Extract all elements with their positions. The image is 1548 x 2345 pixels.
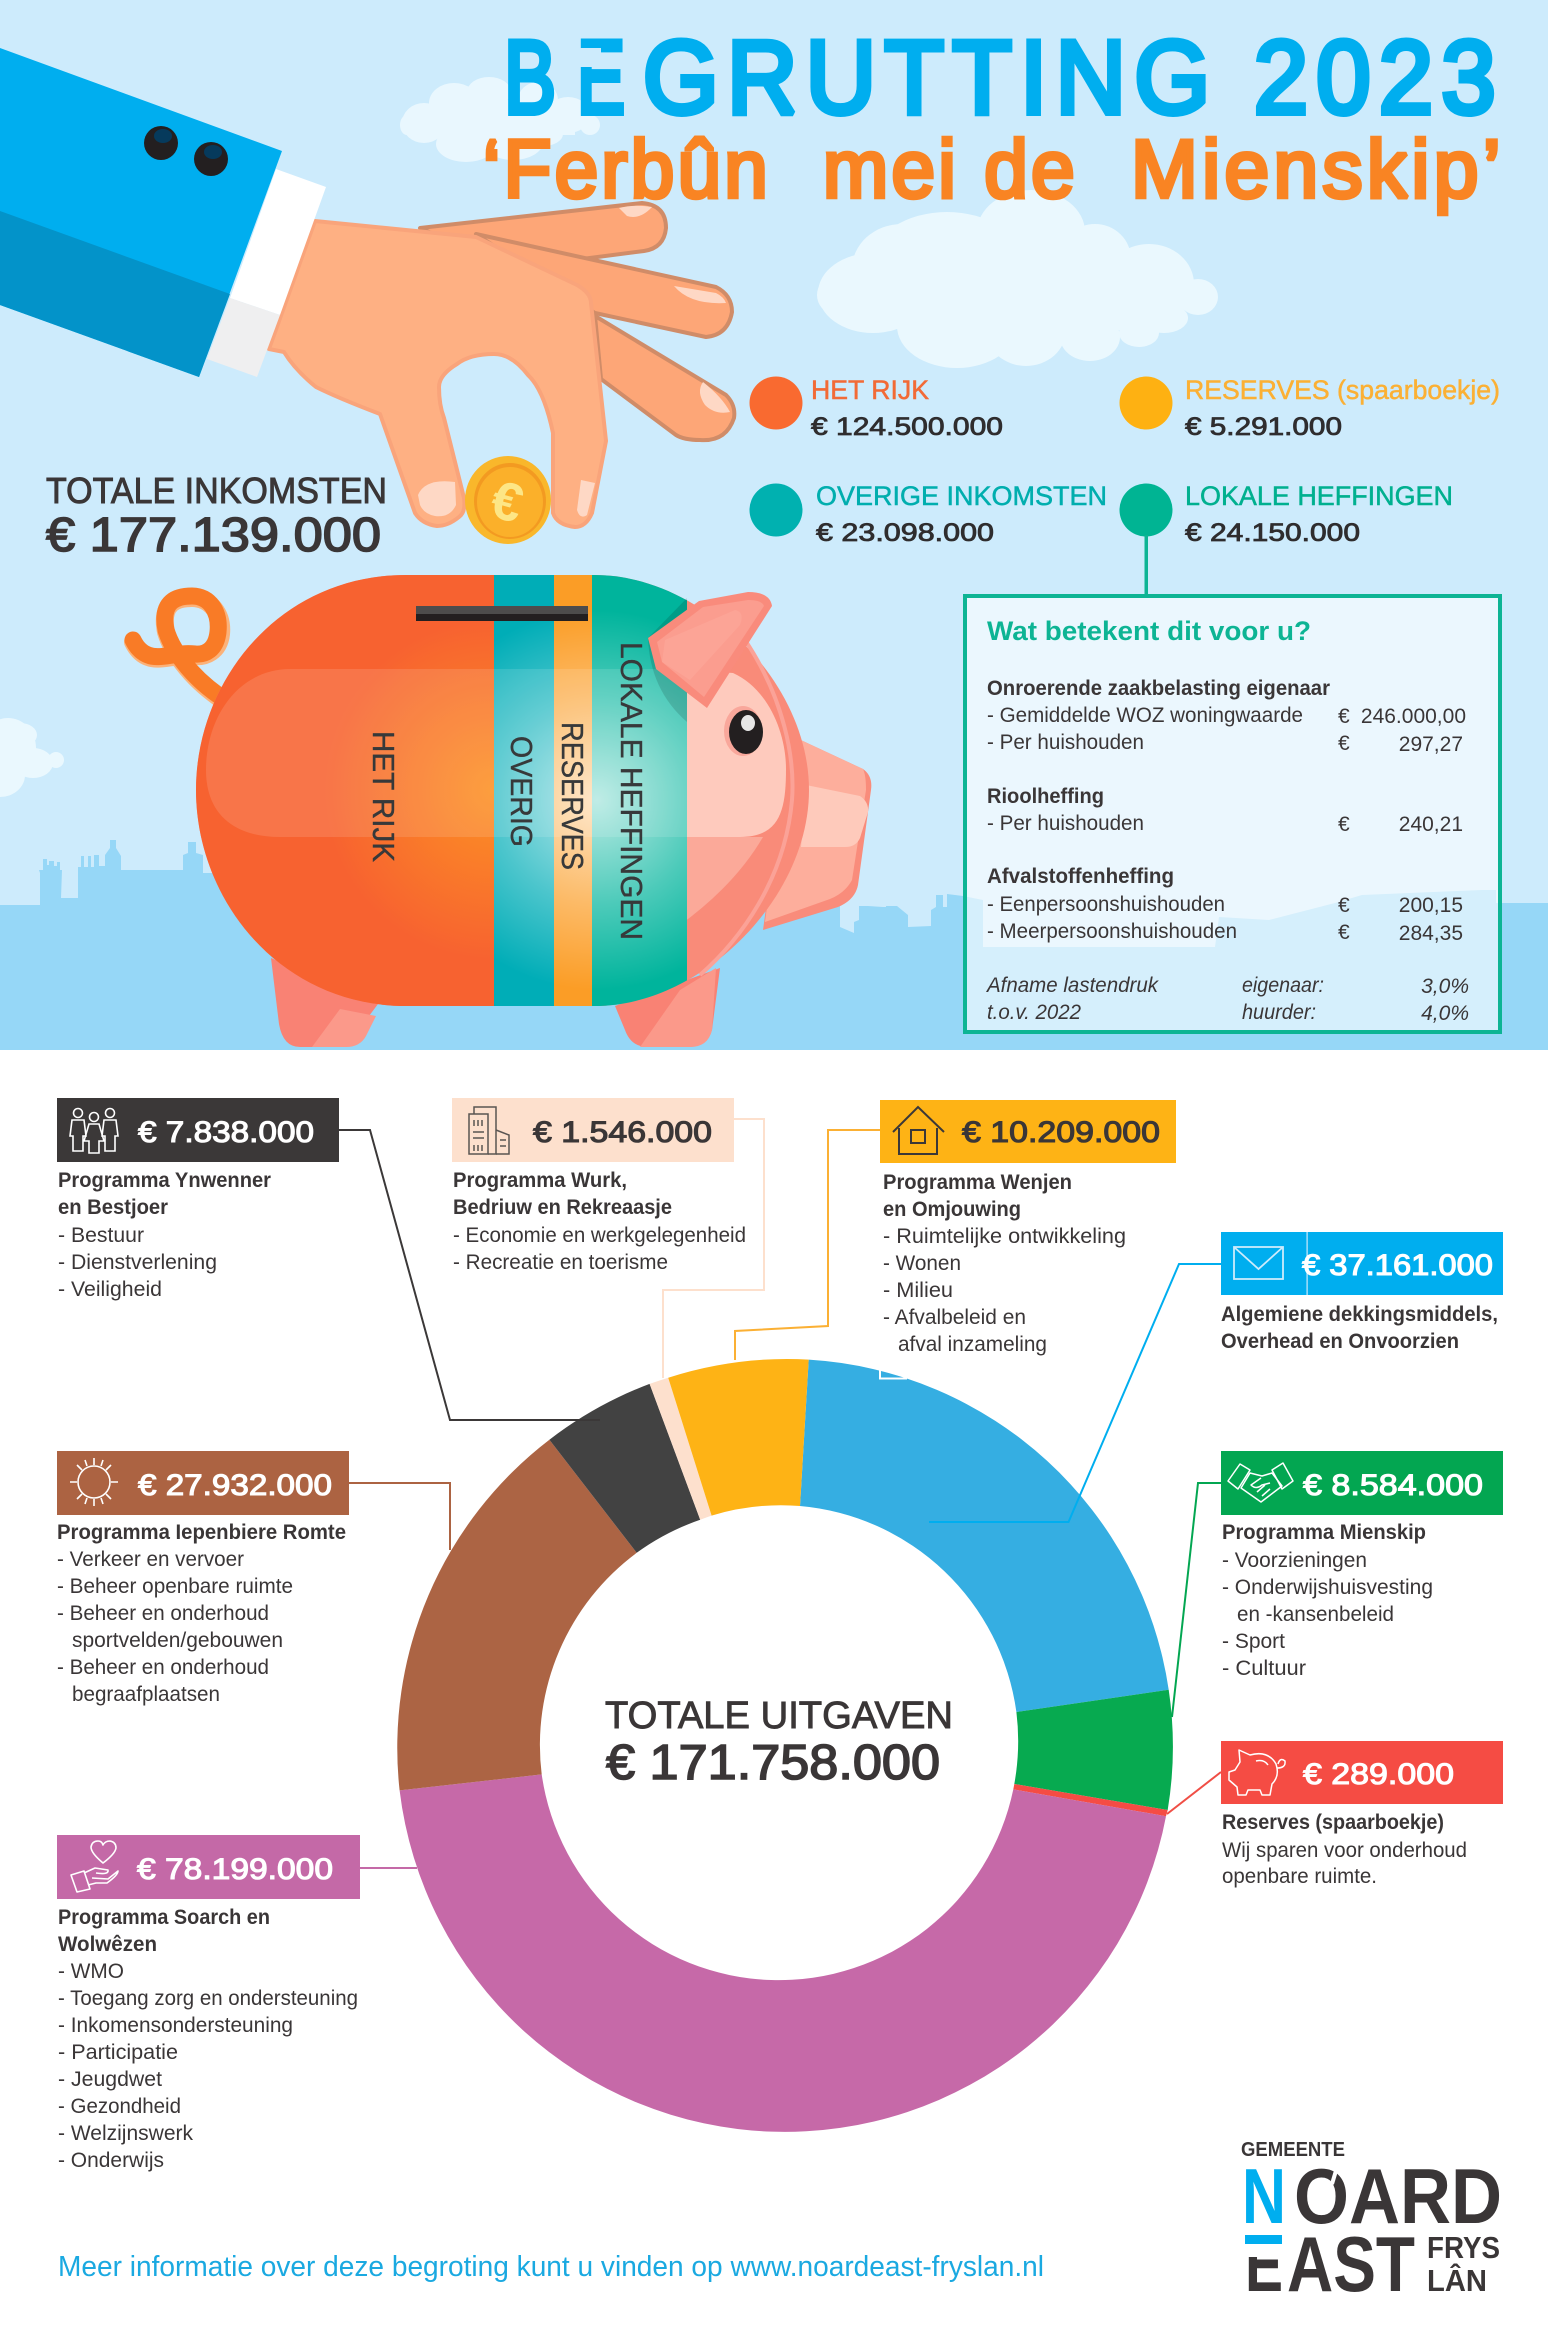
segment: soarch en wolwezen bbox=[400, 1774, 1166, 2132]
legend: overige inkomsten: OVERIGE INKOMSTEN bbox=[816, 481, 1107, 511]
property tax: € bbox=[1338, 732, 1350, 755]
callout: ynwenner en bestjoer: en Bestjoer bbox=[58, 1196, 168, 1219]
total income bbox=[46, 470, 387, 562]
pig face highlight bbox=[680, 669, 786, 837]
callout: iepenbiere romte: Programma Iepenbiere Romte bbox=[57, 1521, 346, 1544]
callout: soarch en wolwezen: - Gezondheid bbox=[58, 2095, 181, 2118]
callout: iepenbiere romte: € 27.932.000 bbox=[138, 1469, 332, 1502]
callout: wenjen en omjouwing: - Milieu bbox=[883, 1279, 953, 1302]
snout bbox=[763, 735, 871, 930]
callout: algemiene dekkingsmiddels bbox=[1221, 1232, 1503, 1353]
legend: lokale heffingen: € 24.150.000 bbox=[1185, 519, 1360, 547]
callout: wurk bedriuw en rekreaasje: € 1.546.000 bbox=[533, 1116, 712, 1149]
callout: algemiene dekkingsmiddels: Algemiene dekkingsmiddels, bbox=[1221, 1303, 1498, 1326]
cuff bbox=[230, 169, 326, 315]
callout: ynwenner en bestjoer: € 7.838.000 bbox=[138, 1116, 314, 1149]
icon: euro coin: € bbox=[485, 469, 529, 535]
sewer charge: 240,21 bbox=[1399, 813, 1463, 836]
callout: iepenbiere romte bbox=[57, 1451, 349, 1706]
stripe labels bbox=[366, 642, 649, 940]
callout: mienskip: € 8.584.000 bbox=[1303, 1469, 1483, 1502]
segment: wenjen en omjouwing bbox=[668, 1359, 809, 1516]
income stripes bbox=[190, 570, 687, 1010]
callout: soarch en wolwezen: - Onderwijs bbox=[58, 2149, 164, 2172]
subtitle: mei de bbox=[823, 124, 1078, 215]
stripe labels: HET RIJK bbox=[366, 731, 401, 862]
legend: lokale heffingen: LOKALE HEFFINGEN bbox=[1185, 481, 1453, 511]
waste charge bbox=[987, 865, 1463, 945]
callout: wurk bedriuw en rekreaasje: - Recreatie en toerisme bbox=[453, 1251, 668, 1274]
legend: het rijk: HET RIJK bbox=[811, 375, 929, 405]
callout: reserves: Wij sparen voor onderhoud bbox=[1222, 1839, 1467, 1862]
icon: envelope bbox=[1234, 1247, 1283, 1279]
legend: reserves bbox=[1120, 375, 1500, 441]
total expenditure bbox=[605, 1695, 953, 1790]
segment: iepenbiere romte bbox=[397, 1440, 637, 1790]
callout: algemiene dekkingsmiddels: Overhead en Onvoorzien bbox=[1221, 1330, 1459, 1353]
callout: mienskip: - Onderwijshuisvesting bbox=[1222, 1576, 1433, 1599]
legs bbox=[271, 958, 720, 1047]
back fingers bbox=[420, 203, 734, 440]
callout: soarch en wolwezen: - WMO bbox=[58, 1960, 124, 1983]
logo: gemeente noardeast fryslan: N bbox=[1242, 2152, 1286, 2240]
total income: TOTALE INKOMSTEN bbox=[46, 470, 387, 511]
stripe labels: OVERIG bbox=[504, 736, 539, 847]
subtitle: Mienskip’ bbox=[1131, 124, 1505, 215]
callout: wenjen en omjouwing bbox=[880, 1100, 1176, 1356]
title: GRUTTING 2023 bbox=[643, 20, 1504, 136]
total expenditure: TOTALE UITGAVEN bbox=[605, 1695, 953, 1737]
waste charge: Afvalstoffenheffing bbox=[987, 865, 1174, 888]
callout: ynwenner en bestjoer: Programma Ynwenner bbox=[58, 1169, 271, 1192]
icon: buildings bbox=[469, 1107, 509, 1154]
panel heading: Wat betekent dit voor u? bbox=[987, 616, 1311, 646]
legend: lokale heffingen bbox=[1120, 481, 1453, 595]
illustration: piggy bank bbox=[133, 570, 871, 1047]
callout: mienskip: - Voorzieningen bbox=[1222, 1549, 1367, 1572]
connector lines bbox=[339, 1119, 1221, 1868]
title: E bbox=[577, 20, 625, 136]
callout: wenjen en omjouwing: - Ruimtelijke ontwikkeling bbox=[883, 1225, 1126, 1248]
callout: mienskip: - Cultuur bbox=[1222, 1657, 1306, 1680]
callout: wurk bedriuw en rekreaasje bbox=[452, 1098, 746, 1274]
callout: iepenbiere romte: begraafplaatsen bbox=[72, 1683, 220, 1706]
callout: wenjen en omjouwing: € 10.209.000 bbox=[962, 1116, 1160, 1149]
callout: reserves: openbare ruimte. bbox=[1222, 1865, 1377, 1888]
property tax: - Gemiddelde WOZ woningwaarde bbox=[987, 704, 1303, 727]
waste charge: € bbox=[1338, 894, 1350, 917]
pig body bbox=[196, 575, 809, 1006]
callout: ynwenner en bestjoer: - Dienstverlening bbox=[58, 1251, 217, 1274]
callout: wenjen en omjouwing: afval inzameling bbox=[898, 1333, 1047, 1356]
burden decrease: eigenaar: bbox=[1242, 974, 1324, 997]
callout: mienskip: Programma Mienskip bbox=[1222, 1521, 1426, 1544]
waste charge: - Meerpersoonshuishouden bbox=[987, 920, 1237, 943]
sky background bbox=[0, 0, 1548, 1050]
callout: iepenbiere romte: - Beheer en onderhoud bbox=[57, 1656, 269, 1679]
property tax: Onroerende zaakbelasting eigenaar bbox=[987, 677, 1330, 700]
illustration: hand with sleeve and coin bbox=[0, 48, 734, 544]
callout: soarch en wolwezen bbox=[57, 1835, 360, 2172]
burden decrease: t.o.v. 2022 bbox=[987, 1001, 1081, 1024]
donut chart: expenditure bbox=[397, 1359, 1173, 2132]
buttons bbox=[144, 126, 228, 176]
icon: sun bbox=[70, 1458, 118, 1506]
icon: house bbox=[893, 1107, 944, 1154]
total expenditure: € 171.758.000 bbox=[606, 1736, 940, 1790]
logo: gemeente noardeast fryslan: AST bbox=[1287, 2220, 1415, 2308]
legend: reserves: € 5.291.000 bbox=[1185, 413, 1342, 441]
icon: heart on hand bbox=[71, 1841, 118, 1892]
footer link text: Meer informatie over deze begroting kunt u vinden op www.noardeast-fryslan.nl bbox=[58, 2251, 1044, 2283]
sewer charge: Rioolheffing bbox=[987, 785, 1104, 808]
cloud: large right bbox=[817, 190, 1218, 368]
callout: soarch en wolwezen: - Inkomensondersteuning bbox=[58, 2014, 293, 2037]
callout: soarch en wolwezen: - Welzijnswerk bbox=[58, 2122, 193, 2145]
callout: iepenbiere romte: - Beheer en onderhoud bbox=[57, 1602, 269, 1625]
palm and gripping fingers bbox=[269, 221, 606, 527]
callout: reserves: Reserves (spaarboekje) bbox=[1222, 1811, 1444, 1834]
icon: people bbox=[70, 1108, 118, 1153]
burden decrease bbox=[985, 974, 1469, 1025]
segment: algemiene dekkingsmiddels bbox=[800, 1360, 1169, 1712]
callout: soarch en wolwezen: Wolwêzen bbox=[58, 1933, 157, 1956]
callout: iepenbiere romte: - Beheer openbare ruimte bbox=[57, 1575, 293, 1598]
waste charge: 200,15 bbox=[1399, 894, 1463, 917]
property tax: € bbox=[1338, 705, 1350, 728]
icon: euro coin bbox=[465, 456, 551, 544]
callout: mienskip bbox=[1221, 1451, 1503, 1680]
cloud: behind title bbox=[400, 77, 600, 162]
logo: gemeente noardeast fryslan: OARD bbox=[1294, 2152, 1502, 2240]
icon: piggy bank bbox=[1229, 1750, 1285, 1795]
property tax: - Per huishouden bbox=[987, 731, 1144, 754]
property tax bbox=[987, 677, 1466, 756]
callout: iepenbiere romte: sportvelden/gebouwen bbox=[72, 1629, 283, 1652]
sewer charge: € bbox=[1338, 813, 1350, 836]
callout: ynwenner en bestjoer: - Bestuur bbox=[58, 1224, 144, 1247]
callout: wenjen en omjouwing: - Wonen bbox=[883, 1252, 961, 1275]
callout: reserves: € 289.000 bbox=[1303, 1758, 1454, 1791]
callout: mienskip: - Sport bbox=[1222, 1630, 1285, 1653]
callout: soarch en wolwezen: € 78.199.000 bbox=[137, 1853, 333, 1886]
waste charge: - Eenpersoonshuishouden bbox=[987, 893, 1225, 916]
stripe labels: RESERVES bbox=[555, 722, 590, 870]
legend: reserves: RESERVES (spaarboekje) bbox=[1185, 375, 1500, 405]
callout: soarch en wolwezen: - Toegang zorg en ondersteuning bbox=[58, 1987, 358, 2010]
waste charge: € bbox=[1338, 921, 1350, 944]
callout: wurk bedriuw en rekreaasje: Bedriuw en Rekreaasje bbox=[453, 1196, 672, 1219]
callout: wenjen en omjouwing: - Afvalbeleid en bbox=[883, 1306, 1026, 1329]
coin slot bbox=[416, 606, 588, 621]
callout: soarch en wolwezen: - Participatie bbox=[58, 2041, 178, 2064]
callout: ynwenner en bestjoer bbox=[57, 1098, 339, 1301]
callout: soarch en wolwezen: - Jeugdwet bbox=[58, 2068, 162, 2091]
tail bbox=[133, 596, 221, 697]
segment: reserves bbox=[1013, 1784, 1168, 1816]
segment: wurk bedriuw rekreaasje bbox=[650, 1378, 712, 1520]
title: B bbox=[504, 20, 556, 136]
nails bbox=[418, 481, 456, 516]
logo: gemeente noardeast fryslan: GEMEENTE bbox=[1241, 2139, 1345, 2161]
property tax: 246.000,00 bbox=[1361, 705, 1466, 728]
skyline bbox=[0, 840, 1548, 1050]
callout: ynwenner en bestjoer: - Veiligheid bbox=[58, 1278, 162, 1301]
segment: mienskip bbox=[1014, 1690, 1173, 1810]
property tax: 297,27 bbox=[1399, 733, 1463, 756]
subtitle: ‘Ferbûn bbox=[483, 124, 771, 215]
sewer charge bbox=[987, 785, 1463, 836]
waste charge: 284,35 bbox=[1399, 922, 1463, 945]
eye bbox=[724, 706, 763, 756]
legend: overige inkomsten bbox=[750, 481, 1107, 547]
legend: het rijk bbox=[750, 375, 1003, 441]
logo: gemeente noardeast fryslan bbox=[1241, 2139, 1502, 2308]
callout: wenjen en omjouwing: en Omjouwing bbox=[883, 1198, 1021, 1221]
burden decrease: 3,0% bbox=[1421, 975, 1469, 998]
sleeve bbox=[0, 48, 282, 377]
logo: gemeente noardeast fryslan: FRYS bbox=[1427, 2230, 1500, 2265]
ear bbox=[648, 592, 772, 722]
callout: wurk bedriuw en rekreaasje: Programma Wurk, bbox=[453, 1169, 627, 1192]
callout: iepenbiere romte: - Verkeer en vervoer bbox=[57, 1548, 244, 1571]
logo: gemeente noardeast fryslan: E bbox=[1245, 2220, 1283, 2308]
cloud: small left bbox=[0, 718, 64, 797]
panel: what this means for you bbox=[965, 596, 1500, 1032]
stripe labels: LOKALE HEFFINGEN bbox=[614, 642, 649, 940]
logo: gemeente noardeast fryslan: LÂN bbox=[1427, 2262, 1487, 2298]
legend: het rijk: € 124.500.000 bbox=[811, 413, 1003, 441]
burden decrease: huurder: bbox=[1242, 1001, 1316, 1024]
callout: reserves bbox=[1221, 1741, 1503, 1888]
burden decrease: Afname lastendruk bbox=[985, 974, 1159, 997]
legend: overige inkomsten: € 23.098.000 bbox=[816, 519, 994, 547]
callout: algemiene dekkingsmiddels: € 37.161.000 bbox=[1302, 1249, 1493, 1282]
callout: wurk bedriuw en rekreaasje: - Economie en werkgelegenheid bbox=[453, 1224, 746, 1247]
callout: wenjen en omjouwing: Programma Wenjen bbox=[883, 1171, 1072, 1194]
burden decrease: 4,0% bbox=[1421, 1002, 1469, 1025]
icon: handshake bbox=[1228, 1463, 1293, 1502]
subtitle bbox=[483, 124, 1505, 215]
total income: € 177.139.000 bbox=[46, 509, 381, 562]
callout: soarch en wolwezen: Programma Soarch en bbox=[58, 1906, 270, 1929]
sewer charge: - Per huishouden bbox=[987, 812, 1144, 835]
segment: ynwenner en bestjoer bbox=[549, 1384, 700, 1553]
callout: mienskip: en -kansenbeleid bbox=[1237, 1603, 1394, 1626]
